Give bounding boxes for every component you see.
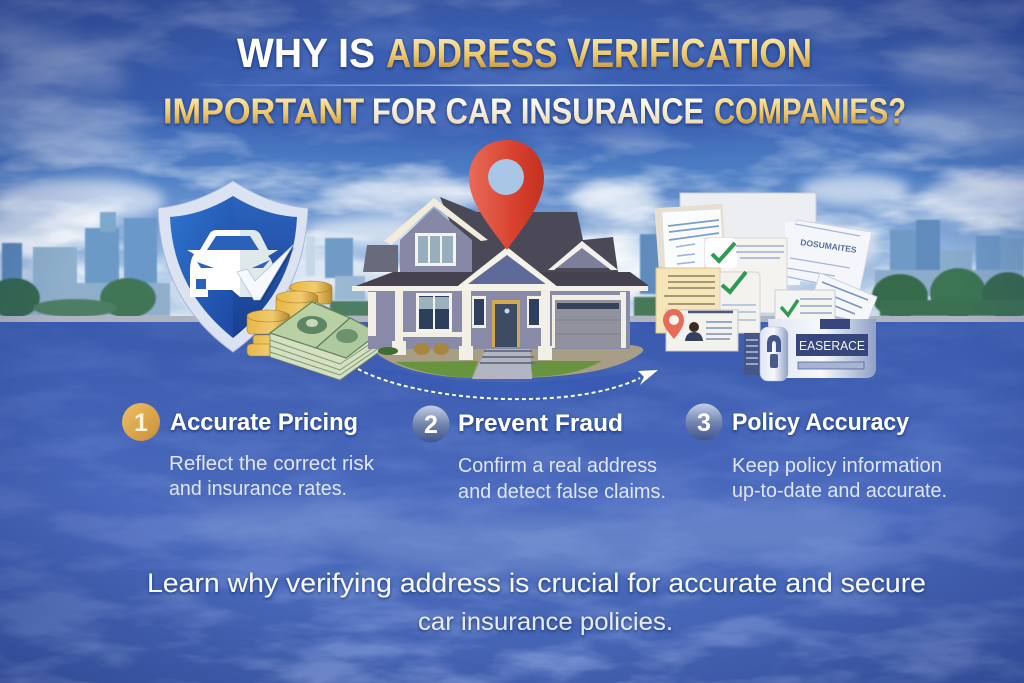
padlock cylinder (760, 327, 788, 381)
water cloud texture (0, 322, 1024, 683)
step 1: Accurate Pricing (122, 403, 375, 500)
white folder (720, 272, 760, 333)
title (163, 30, 906, 132)
lower window (416, 293, 452, 332)
check card (775, 290, 835, 328)
title line 2: IMPORTANT (163, 90, 364, 132)
icon: gold coins (247, 281, 332, 356)
body 3 (732, 455, 947, 502)
icon: red location pin (469, 140, 544, 250)
title line 1: ADDRESS VERIFICATION (386, 30, 812, 76)
yard (378, 345, 643, 378)
badge 2: 2 (424, 411, 438, 439)
badge 3 (686, 404, 722, 440)
right document titled (790, 220, 872, 290)
title line 2 (163, 90, 906, 132)
body 1: Reflect the correct risk (169, 453, 375, 475)
upper window (415, 233, 456, 266)
step 3: Policy Accuracy (686, 404, 947, 502)
badge 1 (122, 403, 160, 441)
clouds in the sky (0, 0, 1024, 318)
shoreline band (0, 316, 1024, 322)
step 2: Prevent Fraud (412, 406, 666, 503)
icon: document pile (654, 193, 877, 381)
icon: shield with car and checkmark (158, 181, 308, 352)
body 1: and insurance rates. (169, 478, 347, 500)
left document (654, 204, 727, 282)
badge 1: 1 (134, 409, 148, 437)
heading 2: Prevent Fraud (458, 410, 623, 437)
closing statement (147, 568, 926, 636)
wall (368, 291, 630, 349)
garage (552, 295, 624, 348)
columns (368, 290, 626, 360)
checkmark (239, 247, 295, 302)
car (187, 230, 278, 297)
city skyline left (0, 212, 370, 318)
walkway and steps (472, 349, 532, 379)
body 2 (458, 455, 666, 503)
closing statement: car insurance policies. (418, 608, 673, 636)
icon: document pile: DOSUMAITES (800, 237, 858, 255)
title line 1 (237, 30, 812, 76)
heading 1: Accurate Pricing (170, 409, 358, 436)
body 2: Confirm a real address (458, 455, 657, 477)
title line 2: FOR CAR INSURANCE (372, 90, 704, 132)
right gable (552, 244, 614, 268)
closing statement: Learn why verifying address is crucial for accurate and secure (147, 568, 926, 598)
body 3: up-to-date and accurate. (732, 480, 947, 502)
body 1 (169, 453, 375, 500)
porch roof (353, 272, 648, 290)
body 3: Keep policy information (732, 455, 942, 477)
book stack (744, 333, 760, 375)
ID card (666, 310, 738, 351)
body 2: and detect false claims. (458, 481, 666, 503)
icon: document pile: EASERACE (799, 338, 865, 353)
upper gable wall (400, 208, 472, 272)
door (492, 300, 520, 347)
bushes (414, 343, 430, 355)
title divider (196, 84, 896, 86)
heading 3: Policy Accuracy (732, 409, 910, 436)
icon: stack of cash (270, 302, 379, 380)
browser page (680, 193, 816, 253)
dashed arrow path (358, 369, 658, 402)
side windows (472, 296, 486, 328)
badge 3: 3 (697, 409, 711, 437)
small doc (808, 273, 877, 323)
server box (768, 319, 876, 378)
yellow folder (656, 268, 720, 333)
clear sky behind title (140, 20, 900, 144)
title line 1: WHY IS (237, 30, 375, 76)
title line 2: COMPANIES? (714, 90, 906, 132)
center gable (458, 252, 552, 287)
icon: house (352, 197, 648, 379)
middle card with check (705, 238, 787, 313)
city skyline right (634, 220, 1024, 320)
badge 2 (412, 406, 450, 442)
upper roof (440, 197, 618, 272)
